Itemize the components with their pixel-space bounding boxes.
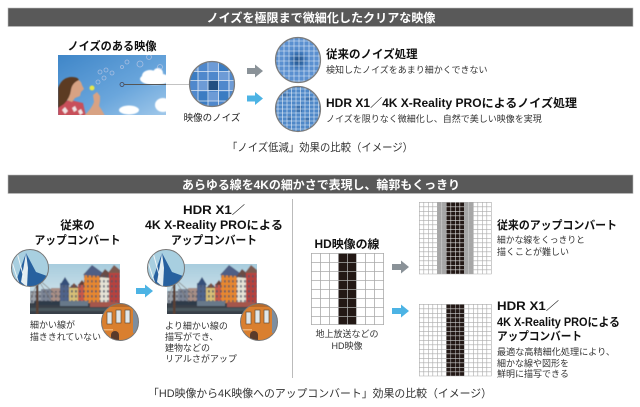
icon: magnified image noise: [188, 60, 236, 108]
text: HDR X1 noise processing: [326, 96, 578, 124]
icon: conventional noise circle: [274, 36, 322, 84]
text: HDR X1 photo note: [165, 320, 237, 364]
arrow: blue to HDR X1 grid: [392, 304, 409, 318]
text: HDR X1 photo note: 描写ができ、: [165, 331, 218, 342]
photo: HDR X1 harbor with zoom circles: [147, 249, 278, 341]
heading: upconvert section banner: あらゆる線を4Kの細かさで表現し、輪郭もくっきり: [182, 177, 460, 192]
text: conventional photo note: 細かい線が: [30, 319, 75, 330]
chart: conventional upconvert grid: [419, 202, 492, 274]
text: conventional upconvert description: 描くことが難しい: [497, 246, 569, 257]
chart: HD pixel grid: [311, 253, 384, 325]
text: HD source note: 地上放送などの: [315, 328, 379, 339]
heading: HDR X1 upconvert: 4K X-Reality PROによる: [145, 219, 283, 232]
text: conventional noise processing: 検知したノイズをあまり細かくできない: [326, 64, 487, 75]
text: HDR X1 upconvert description: 4K X-Reality PROによる: [497, 316, 620, 329]
icon: HDR X1 noise circle: [274, 85, 322, 133]
text: conventional upconvert description: 細かな線をくっきりと: [497, 234, 585, 245]
chart: HDR X1 upconvert grid: [419, 304, 492, 376]
text: conventional noise processing: [326, 47, 487, 75]
heading: conventional upconvert: 従来の: [60, 218, 95, 232]
text: HDR X1 upconvert description: 鮮明に描写できる: [497, 368, 569, 379]
pointer line from photo to noise circle: [120, 82, 190, 86]
caption: upconvert comparison: 「HD映像から4K映像へのアップコンバート」効果の比較（イメージ）: [148, 387, 492, 400]
text: conventional photo note: [30, 319, 101, 342]
heading: noise section banner: [8, 8, 633, 26]
heading: HD image lines: HD映像の線: [314, 237, 380, 251]
photo: conventional harbor with zoom circles: [11, 249, 139, 341]
text: HDR X1 upconvert description: アップコンバート: [497, 330, 582, 343]
heading: noise section banner: ノイズを極限まで微細化したクリアな映像: [206, 10, 436, 25]
divider: [292, 199, 294, 378]
text: HDR X1 upconvert description: HDR X1／: [497, 300, 560, 313]
text: HDR X1 photo note: 建物などの: [165, 342, 210, 353]
text: HDR X1 upconvert description: 細かな線や図形を: [497, 358, 569, 368]
label: image noise: 映像のノイズ: [184, 112, 241, 124]
text: HDR X1 upconvert description: 最適な高精細化処理により、: [497, 346, 615, 357]
heading: conventional upconvert: [34, 218, 120, 247]
arrow: blue to HDR X1: [247, 92, 263, 105]
arrow: grey to conventional: [247, 64, 263, 78]
text: HDR X1 photo note: リアルさがアップ: [165, 353, 237, 364]
heading: upconvert section banner: [8, 175, 633, 194]
text: HDR X1 noise processing: ノイズを限りなく微細化し、自然で美しい映像を実現: [326, 113, 542, 124]
text: HD source note: HD映像: [332, 340, 362, 351]
text: conventional upconvert description: [497, 218, 617, 257]
text: conventional upconvert description: 従来のアップコンバート: [497, 218, 617, 232]
heading: conventional upconvert: アップコンバート: [34, 234, 120, 247]
heading: HDR X1 upconvert: アップコンバート: [171, 234, 257, 247]
text: conventional noise processing: 従来のノイズ処理: [326, 47, 418, 61]
heading: HDR X1 upconvert: HDR X1／: [183, 204, 246, 217]
heading: HDR X1 upconvert: [145, 204, 283, 247]
photo: girl blowing bubbles: [58, 54, 171, 116]
text: HDR X1 noise processing: HDR X1／4K X-Reality PROによるノイズ処理: [326, 96, 578, 110]
caption: noise comparison: 「ノイズ低減」効果の比較（イメージ）: [227, 140, 413, 154]
text: conventional photo note: 描ききれていない: [30, 331, 101, 342]
arrow: grey to conventional grid: [392, 260, 409, 274]
text: HDR X1 upconvert description: [497, 300, 620, 379]
text: HDR X1 photo note: より細かい線の: [165, 320, 228, 331]
arrow: blue between harbor photos: [136, 284, 153, 298]
heading: noisy image: ノイズのある映像: [68, 39, 157, 53]
text: HD source note: [315, 328, 379, 351]
